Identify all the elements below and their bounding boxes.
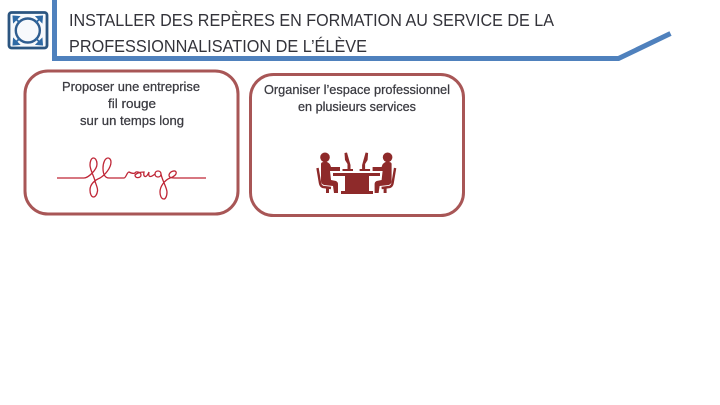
panel text: proposer une entreprise: sur un temps long: [80, 113, 184, 128]
panel: professional space services: [250, 74, 464, 216]
title: INSTALLER DES REPÈRES EN FORMATION AU SERVICE DE LA: [69, 10, 554, 30]
table: [333, 173, 380, 194]
panel text: organiser l'espace professionnel: en plusieurs services: [298, 99, 416, 114]
left person, chair and monitor: [318, 152, 353, 193]
panel text: proposer une entreprise: Proposer une entreprise: [62, 79, 200, 94]
right person, chair and monitor: [360, 152, 395, 193]
title: [69, 10, 554, 56]
panel text: proposer une entreprise: [62, 79, 200, 128]
icon: circle with four corner arrows: [9, 12, 47, 48]
panel text: proposer une entreprise: fil rouge: [108, 96, 156, 111]
panel text: organiser l'espace professionnel: Organiser l’espace professionnel: [264, 82, 450, 97]
panel: fil rouge enterprise: [25, 71, 238, 214]
title frame: blue bracket line with rising end: [54, 0, 670, 58]
panel text: organiser l'espace professionnel: [264, 82, 450, 114]
icon: people working at a table with computers: [318, 152, 395, 194]
icon: handwritten red thread: [57, 158, 206, 199]
title: PROFESSIONNALISATION DE L’ÉLÈVE: [69, 36, 367, 56]
